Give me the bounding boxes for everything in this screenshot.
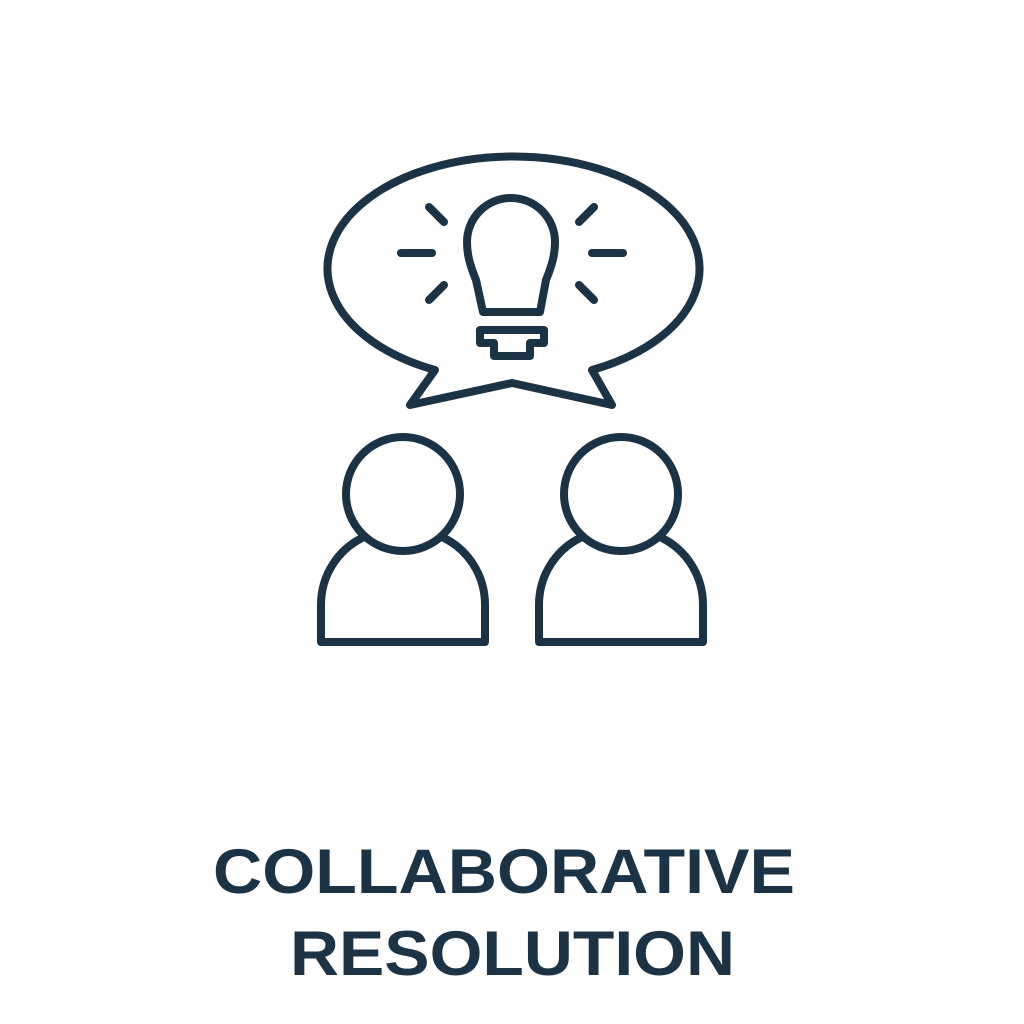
icon: collaborative resolution <box>321 156 703 642</box>
person left <box>321 437 485 642</box>
person right <box>539 437 703 642</box>
title: COLLABORATIVE <box>213 837 795 907</box>
icon: light bulb <box>401 198 623 356</box>
title <box>213 837 795 989</box>
title: RESOLUTION <box>290 919 735 989</box>
speech bubble <box>328 156 699 405</box>
